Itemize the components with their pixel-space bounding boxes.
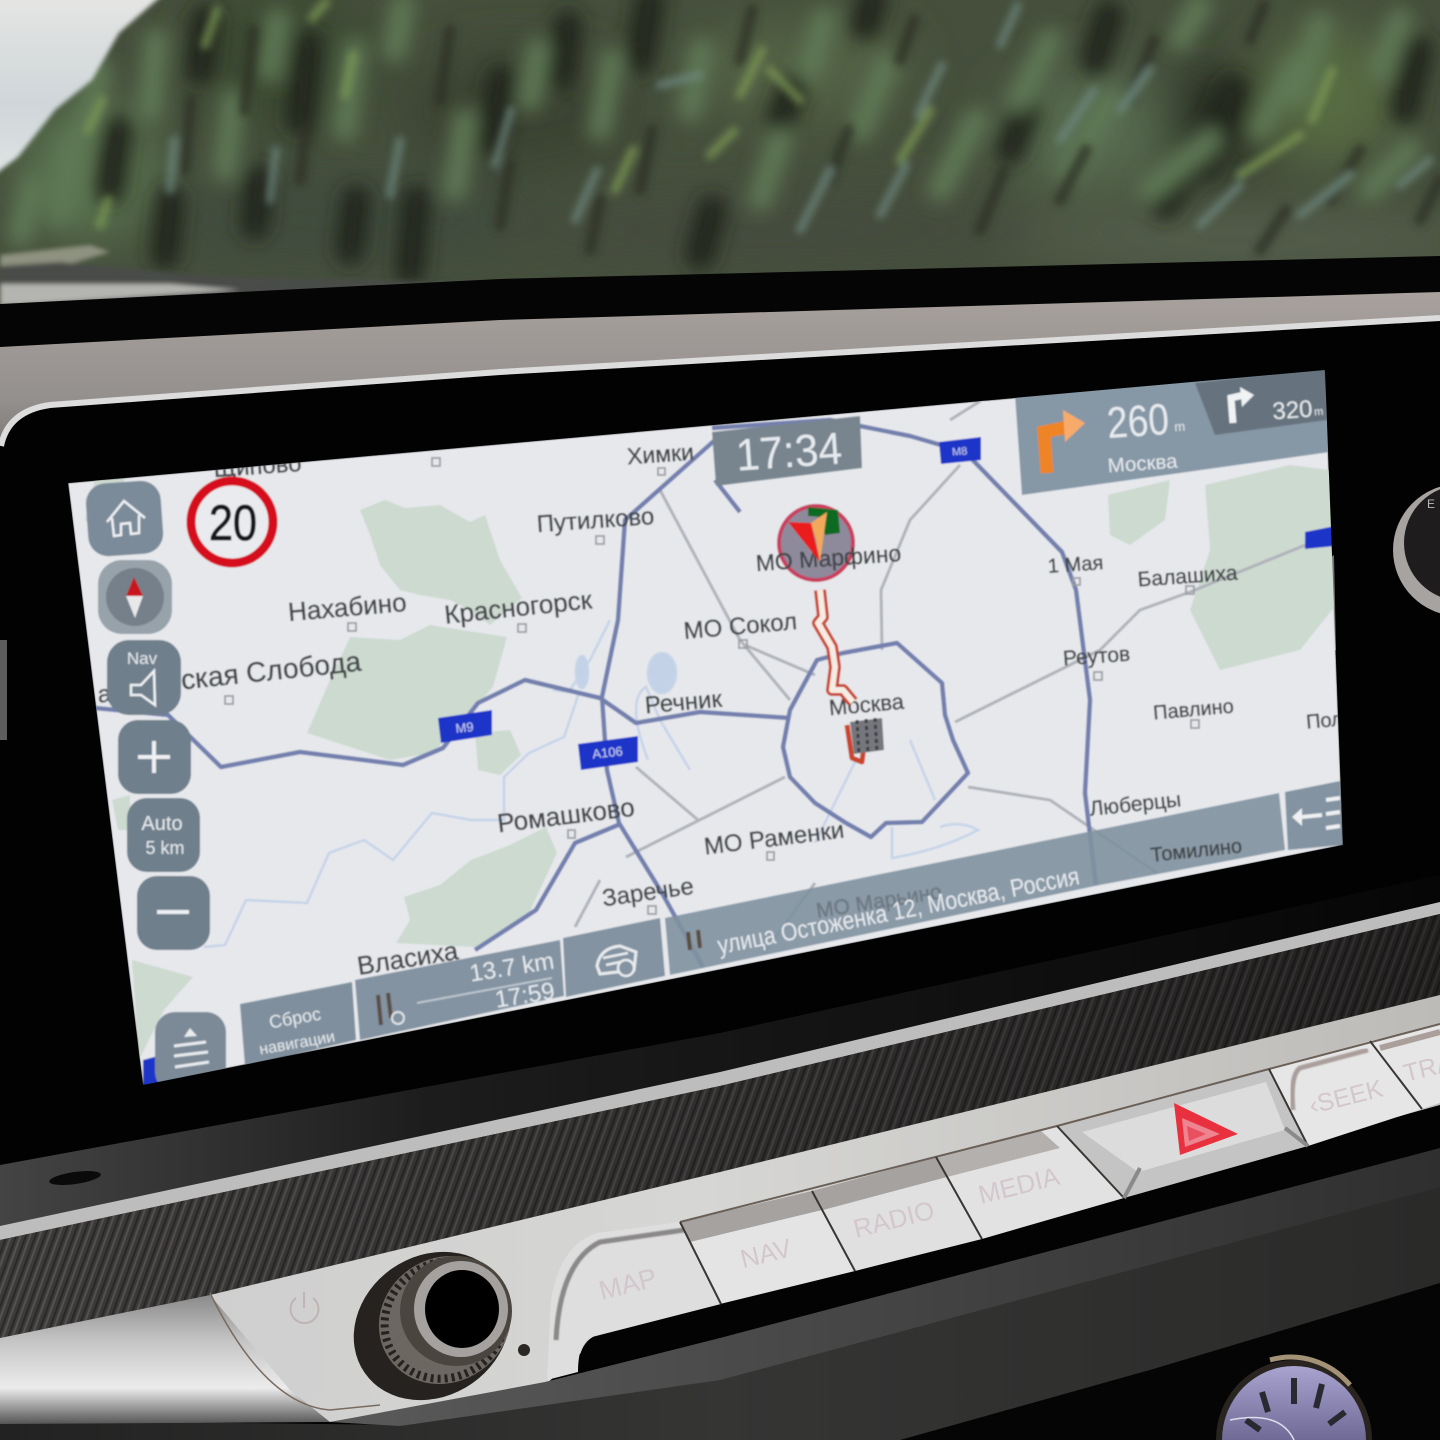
map labels: МО Сокол xyxy=(683,608,798,645)
lower dash: leather and dark area xyxy=(0,1180,1440,1440)
screen side tab xyxy=(1327,555,1336,654)
current position marker xyxy=(755,506,902,580)
guidance panel: m xyxy=(1174,419,1186,434)
dashboard top: grey-brown surface xyxy=(0,292,1440,445)
guidance panel: m xyxy=(1314,406,1324,418)
button: NAV: NAV xyxy=(737,1232,795,1274)
windshield base: black band xyxy=(0,256,1440,347)
left edge bracket xyxy=(0,640,7,740)
power icon xyxy=(290,1292,319,1323)
button seams xyxy=(680,1024,1440,1304)
map labels: Красногорск xyxy=(443,584,594,630)
guidance panel xyxy=(1015,368,1330,495)
button: auto scale: Auto xyxy=(141,813,183,835)
map labels: Речник xyxy=(644,686,723,719)
road badges: А106 xyxy=(592,743,623,762)
panel: trip xyxy=(355,940,564,1040)
button: compass xyxy=(98,560,172,634)
distance text: 260 xyxy=(1105,395,1171,448)
button: RADIO: RADIO xyxy=(850,1195,937,1244)
map labels: Заречье xyxy=(600,873,695,912)
button: MEDIA xyxy=(936,1126,1124,1239)
road badges xyxy=(143,437,1335,1085)
panel: address: Томилино xyxy=(1150,835,1243,867)
panel: address xyxy=(665,793,1285,975)
button: TRACK xyxy=(1370,1024,1440,1109)
forest areas xyxy=(85,465,1340,1060)
city markers xyxy=(225,458,1199,914)
button: nav volume xyxy=(107,640,181,715)
minor roads xyxy=(575,395,1330,953)
panel: reset navigation xyxy=(240,982,356,1066)
water xyxy=(204,620,978,947)
fine motion streaks xyxy=(88,2,1440,250)
clock panel xyxy=(712,416,862,486)
left buttons xyxy=(85,480,226,1092)
button: nav volume: Nav xyxy=(127,649,158,668)
panel: traffic xyxy=(563,918,665,997)
wide soft motion streaks xyxy=(20,0,1419,270)
map labels: а xyxy=(97,680,113,709)
panel: reset navigation: Сброс xyxy=(267,1004,322,1032)
button: MAP xyxy=(547,1222,721,1380)
next turn arrow xyxy=(1231,387,1254,423)
panel: address: улица Остоженка 12, Москва, Россия xyxy=(715,862,1082,960)
map labels: Химки xyxy=(626,439,695,469)
panel: trip: 13.7 km xyxy=(468,948,556,988)
button: auto scale: 5 km xyxy=(145,838,185,858)
map labels: ская Слобода xyxy=(180,646,363,695)
route line xyxy=(818,590,864,762)
road edge xyxy=(0,243,430,304)
clock xyxy=(1216,1357,1372,1440)
panel: trip: 17:59 xyxy=(493,978,557,1014)
broad foliage tones xyxy=(20,0,1440,265)
panel: reset navigation: навигации xyxy=(258,1029,336,1059)
glossy band below bezel xyxy=(0,875,1440,1232)
destination flag xyxy=(850,718,884,754)
button row xyxy=(547,1024,1440,1380)
outside scenery: blurred trees xyxy=(0,0,1440,310)
map background xyxy=(68,370,1343,1085)
button: RADIO xyxy=(812,1157,982,1271)
current position marker: МО Марфино xyxy=(755,540,902,576)
map labels: Павлино xyxy=(1152,696,1235,724)
map labels: МО Раменки xyxy=(703,817,846,861)
clock panel: 17:34 xyxy=(734,422,844,481)
volume knob xyxy=(325,1222,539,1430)
major roads xyxy=(95,420,1096,967)
silver control strip xyxy=(210,995,1440,1422)
map labels: Путилково xyxy=(536,503,655,538)
button: SEEK: ‹SEEK xyxy=(1306,1075,1386,1120)
sky gap xyxy=(0,0,168,178)
button: menu xyxy=(155,1012,226,1092)
road badges: М9 xyxy=(455,719,474,736)
chrome strip under slot xyxy=(330,1148,1440,1426)
button: SEEK xyxy=(1269,1041,1422,1146)
button: zoom out xyxy=(137,876,210,950)
button: MAP: MAP xyxy=(596,1263,660,1306)
silver panel left xyxy=(0,1295,330,1424)
map labels: Люберцы xyxy=(1088,788,1182,821)
textured wood trim xyxy=(0,914,1440,1338)
map labels: Щипово xyxy=(213,450,302,483)
right rotary knob: E xyxy=(1427,497,1435,511)
map labels: Власиха xyxy=(355,935,461,981)
map labels: Ромашково xyxy=(496,792,636,838)
bezel chrome edge xyxy=(1,318,1440,446)
bottom panels xyxy=(240,781,1343,1066)
button: auto scale xyxy=(127,798,200,872)
button: MEDIA: MEDIA xyxy=(975,1161,1063,1210)
button: zoom in xyxy=(118,720,191,794)
guidance panel: Москва xyxy=(1107,451,1179,477)
speed limit sign xyxy=(191,481,273,563)
guidance panel: 320 xyxy=(1272,396,1313,425)
button: hazard xyxy=(1057,1069,1308,1198)
map labels: Реутов xyxy=(1062,643,1131,670)
road badges: М8 xyxy=(952,445,968,459)
panel: list toggle xyxy=(1285,781,1343,850)
map labels: Москва xyxy=(828,689,906,720)
button: NAV xyxy=(680,1191,855,1304)
orange turn arrow xyxy=(1044,410,1085,473)
map labels: Балашиха xyxy=(1137,562,1239,591)
screen bezel: black frame xyxy=(0,320,1440,1165)
map labels: Нахабино xyxy=(287,587,408,627)
map labels: 1 Мая xyxy=(1047,552,1104,578)
navigation screen xyxy=(68,368,1344,1092)
button: home xyxy=(85,480,164,558)
map labels: Пол xyxy=(1305,708,1344,734)
map labels xyxy=(97,439,1344,981)
panel: address: МО Марьино xyxy=(815,880,943,923)
speed limit sign: 20 xyxy=(209,495,257,551)
black slot below buttons xyxy=(578,1105,1440,1372)
lower chrome trim line xyxy=(0,902,1440,1240)
right rotary knob xyxy=(1393,484,1440,616)
